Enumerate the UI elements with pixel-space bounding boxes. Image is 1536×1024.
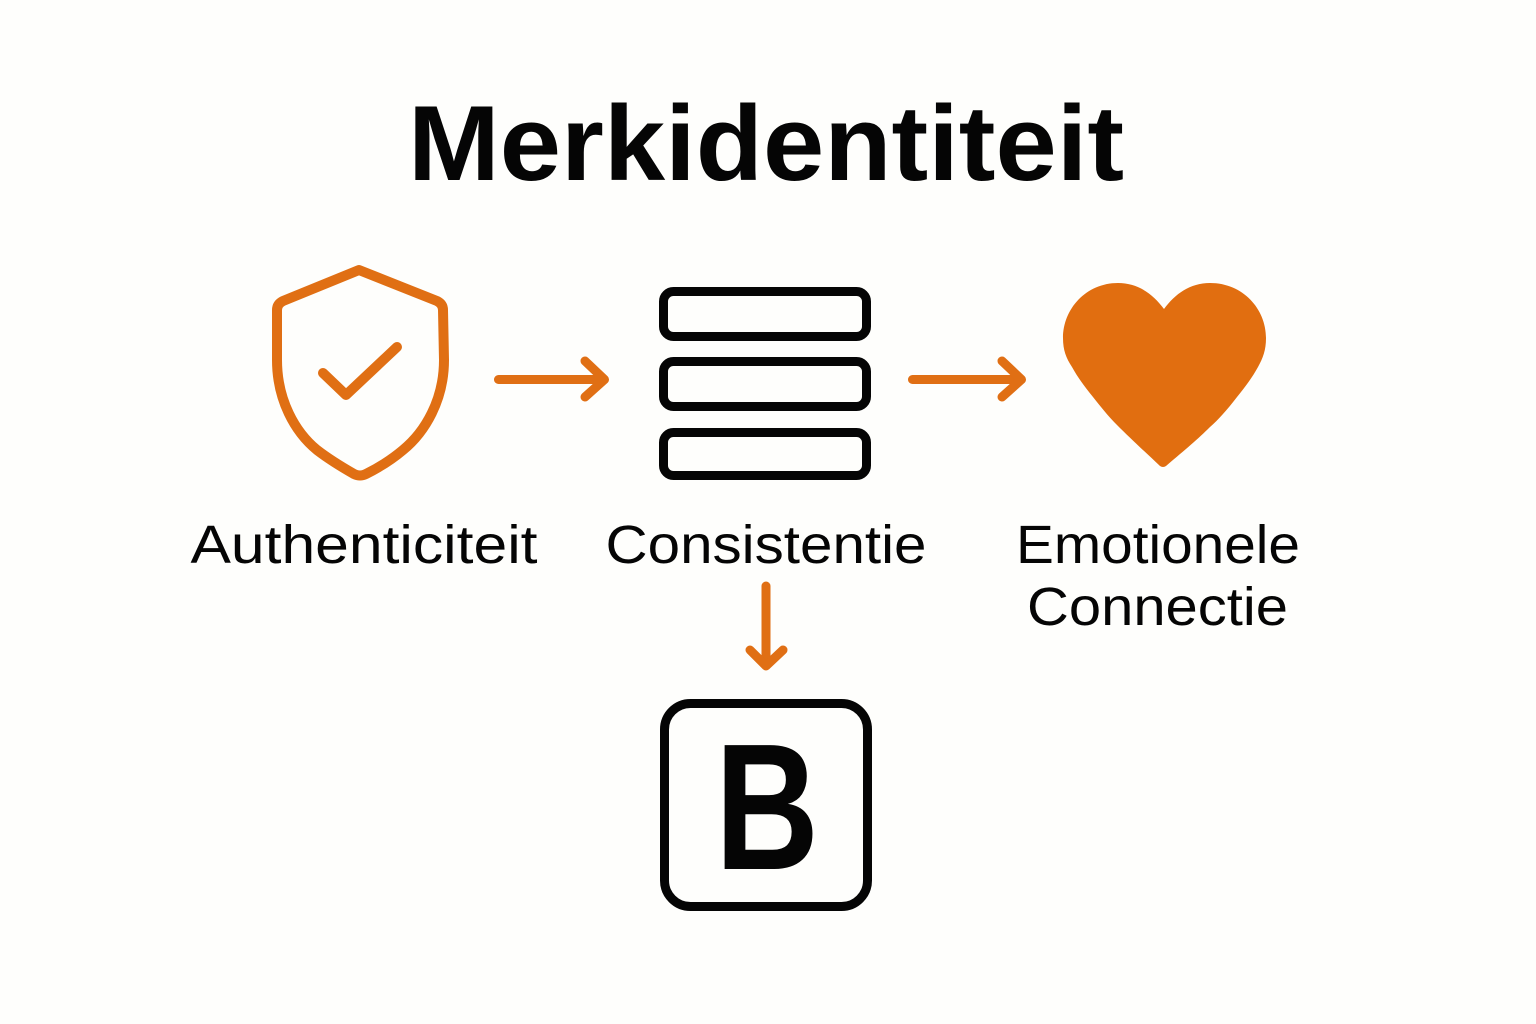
arrow: authenticity to consistency [498, 361, 604, 397]
arrow: consistency down to brand [750, 586, 783, 666]
icon: stacked bars [664, 292, 866, 476]
label: Emotionele Connectie [1016, 515, 1300, 637]
icon: heart [1063, 283, 1266, 467]
icon: shield with check [277, 270, 444, 476]
label: Emotionele Connectie: Connectie [1027, 577, 1288, 637]
icon: brand B box [664, 704, 868, 908]
icon: brand B box: B [715, 707, 819, 908]
arrow: consistency to emotional connection [912, 361, 1022, 397]
title: Merkidentiteit [408, 83, 1124, 203]
label: Emotionele Connectie: Emotionele [1016, 515, 1300, 575]
label: Authenticiteit: Authenticiteit [190, 515, 538, 575]
label: Consistentie: Consistentie [606, 515, 926, 575]
